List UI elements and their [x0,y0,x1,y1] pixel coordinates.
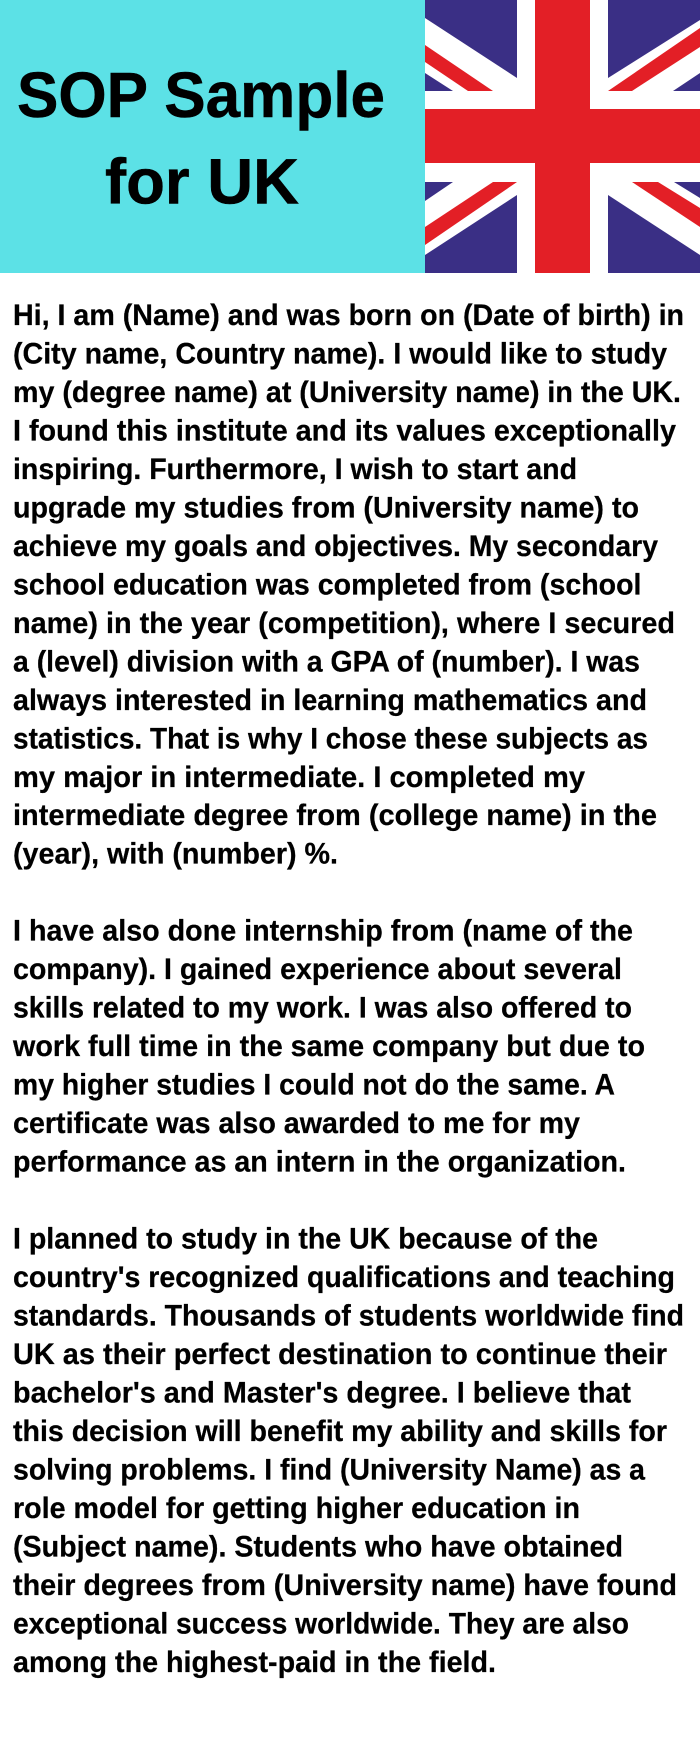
paragraph: introduction and education: school education was completed from (school [13,568,642,601]
paragraph: introduction and education [13,299,684,871]
paragraph: introduction and education: (City name, Country name). I would like to study [13,338,667,370]
paragraph: internship experience: company). I gained experience about several [13,953,622,986]
paragraph: introduction and education: inspiring. Furthermore, I wish to start and [13,453,577,486]
paragraph: internship experience: my higher studies I could not do the same. A [13,1069,615,1102]
paragraph: reasons to study in the UK: their degrees from (University name) have found [13,1569,677,1602]
paragraph: introduction and education: achieve my goals and objectives. My secondary [13,530,658,563]
title: for UK [105,146,299,218]
paragraph: internship experience: certificate was also awarded to me for my [13,1107,580,1140]
paragraph: introduction and education: statistics. That is why I chose these subjects as [13,722,648,755]
paragraph: introduction and education: my (degree name) at (University name) in the UK. [13,376,681,409]
paragraph: introduction and education: intermediate degree from (college name) in the [13,799,657,832]
title [17,59,385,218]
paragraph: internship experience: skills related to my work. I was also offered to [13,992,632,1025]
paragraph: introduction and education: (year), with (number) %. [13,838,338,871]
header panel [0,0,700,273]
paragraph: reasons to study in the UK: (Subject name). Students who have obtained [13,1530,623,1563]
paragraph: reasons to study in the UK: bachelor's and Master's degree. I believe that [13,1376,631,1409]
paragraph: internship experience: work full time in the same company but due to [12,1030,645,1063]
paragraph: reasons to study in the UK: role model for getting higher education in [13,1492,580,1525]
paragraph: introduction and education: my major in intermediate. I completed my [13,761,585,794]
paragraph: introduction and education: Hi, I am (Name) and was born on (Date of birth) in [13,299,684,332]
paragraph: introduction and education: upgrade my studies from (University name) to [13,491,639,524]
paragraph: reasons to study in the UK: I planned to study in the UK because of the [13,1222,598,1256]
paragraph: internship experience [12,915,645,1179]
paragraph: reasons to study in the UK: exceptional success worldwide. They are also [13,1607,629,1640]
title: SOP Sample [17,59,385,131]
paragraph: reasons to study in the UK: among the highest-paid in the field. [13,1646,496,1679]
paragraph: introduction and education: a (level) division with a GPA of (number). I was [13,645,640,678]
paragraph: reasons to study in the UK: this decision will benefit my ability and skills for [13,1415,667,1448]
paragraph: internship experience: performance as an intern in the organization. [13,1146,626,1179]
paragraph: internship experience: I have also done internship from (name of the [13,915,633,948]
icon: UK flag [425,0,700,273]
paragraph: introduction and education: I found this institute and its values exceptionally [13,414,676,447]
paragraph: reasons to study in the UK: solving problems. I find (University Name) as a [13,1453,645,1486]
paragraph: reasons to study in the UK: UK as their perfect destination to continue their [13,1338,667,1371]
paragraph: introduction and education: always interested in learning mathematics and [13,684,647,717]
paragraph: reasons to study in the UK: country's recognized qualifications and teaching [13,1261,675,1294]
paragraph: introduction and education: name) in the year (competition), where I secured [13,607,675,640]
paragraph: reasons to study in the UK [13,1222,684,1679]
